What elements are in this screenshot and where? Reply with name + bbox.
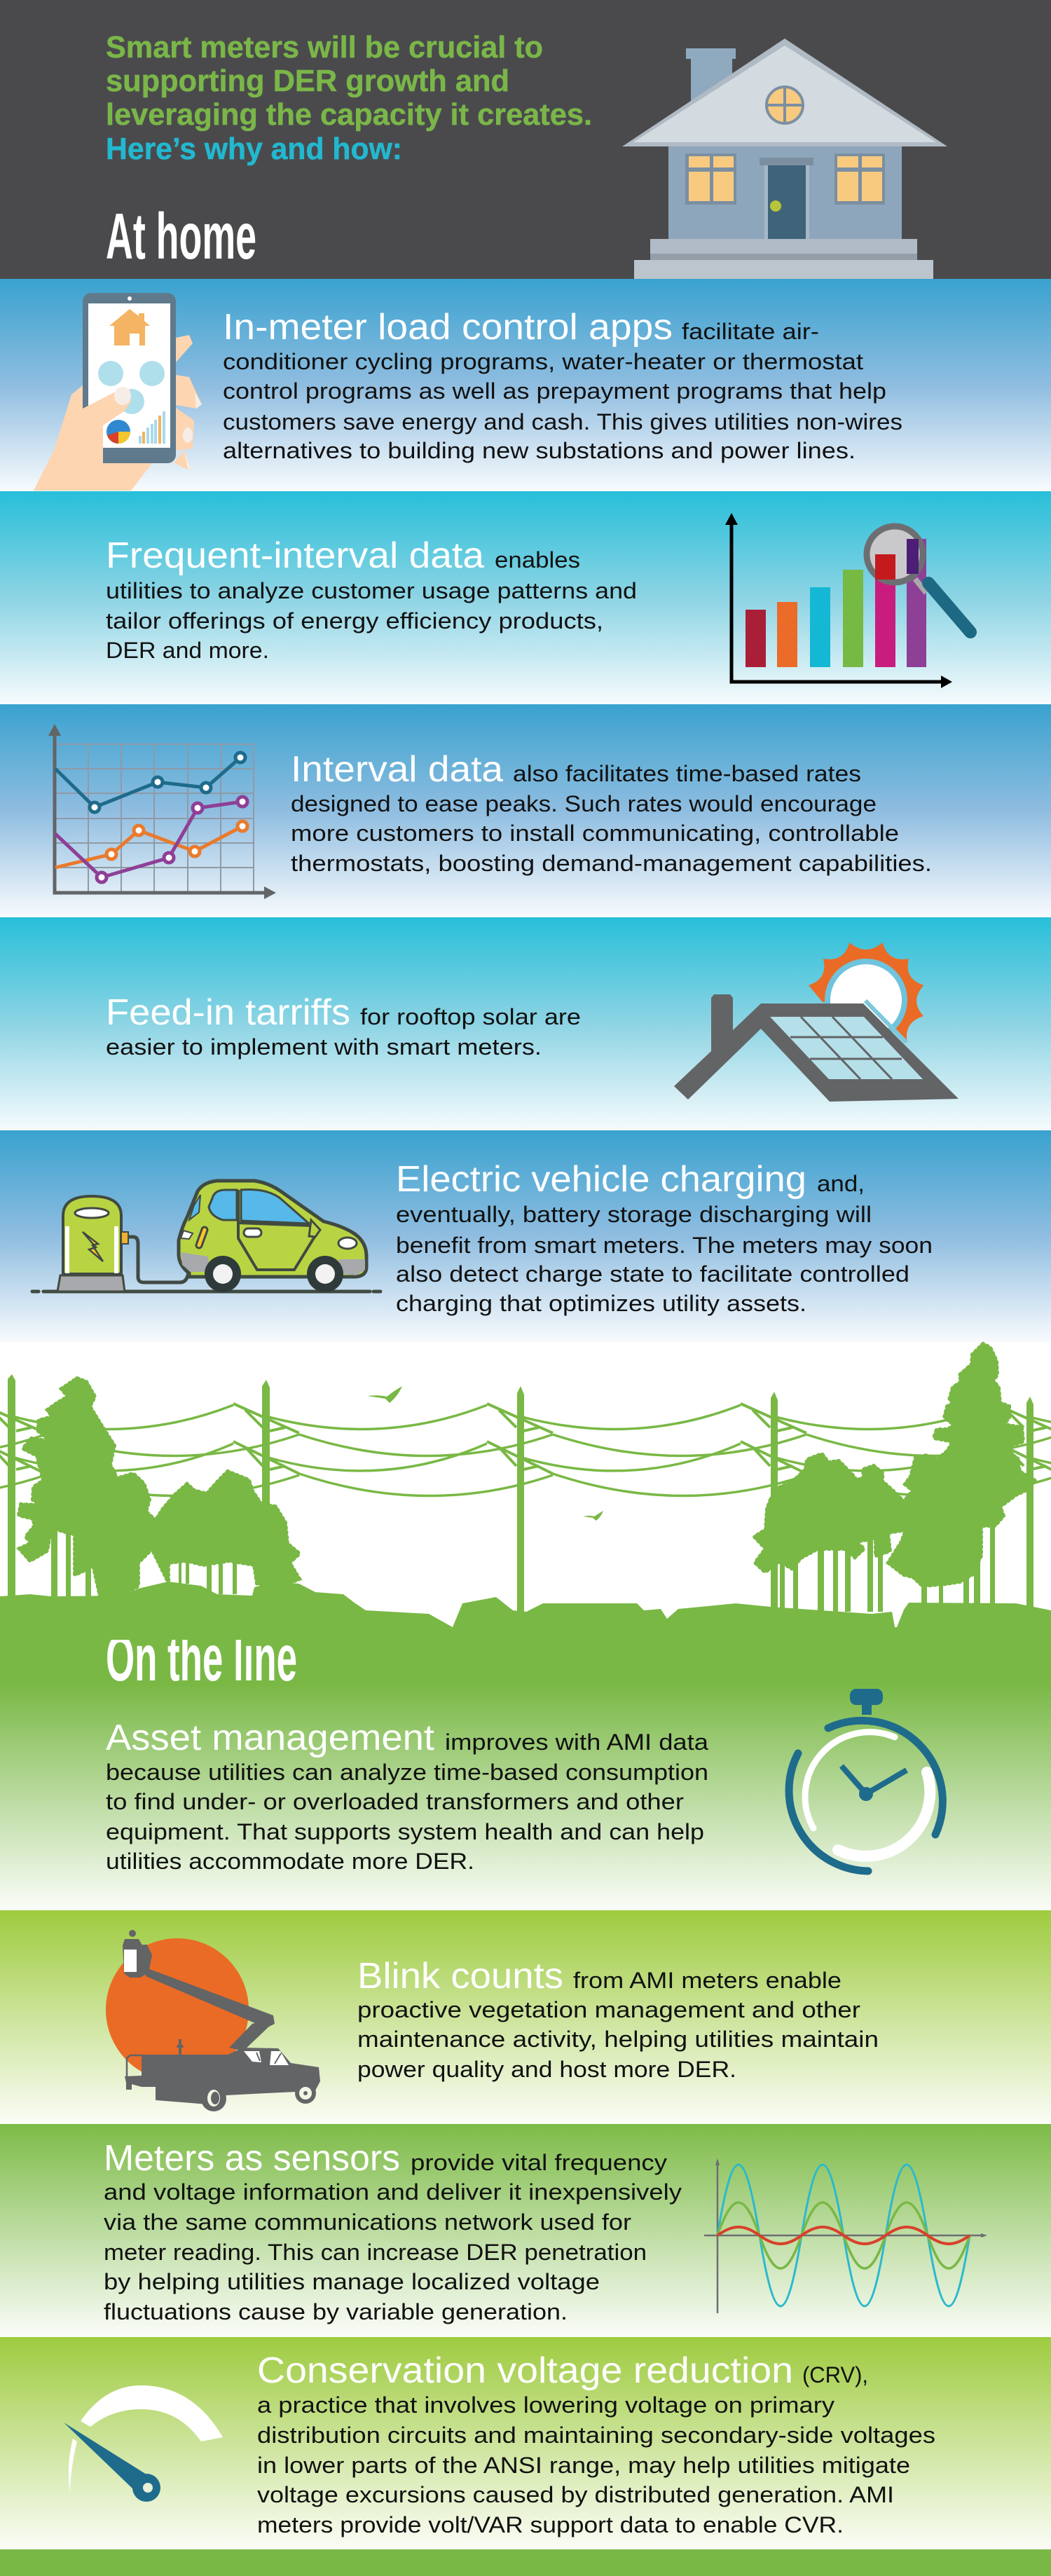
icon: house xyxy=(622,39,947,279)
text block: electric vehicle charging: eventually, battery storage discharging will xyxy=(396,1202,872,1227)
text block: frequent-interval: enables xyxy=(495,547,580,573)
text block: frequent-interval: tailor offerings of energy efficiency products, xyxy=(106,608,603,633)
text block: electric vehicle charging: also detect charge state to facilitate controlled xyxy=(396,1261,909,1287)
icon: bucket truck xyxy=(106,1930,320,2111)
text block: blink counts xyxy=(357,1968,879,2082)
chart: bars with magnifier xyxy=(725,513,970,688)
text block: interval data xyxy=(291,761,932,876)
text block: frequent-interval xyxy=(106,547,637,663)
text block: blink counts: power quality and host more DER. xyxy=(357,2057,736,2082)
text block: interval data: thermostats, boosting demand-management capabilities. xyxy=(291,851,932,876)
heading: feed-in tarriffs: Feed-in tarriffs xyxy=(106,992,350,1033)
title: Smart meters will be crucial to xyxy=(106,30,543,64)
text block: blink counts: proactive vegetation management and other xyxy=(357,1997,860,2022)
text block: asset management xyxy=(106,1729,708,1874)
text block: meters as sensors: fluctuations cause by variable generation. xyxy=(104,2299,568,2324)
heading: conservation voltage reduction: Conservation voltage reduction xyxy=(257,2350,793,2391)
text block: asset management: to find under- or overloaded transformers and other xyxy=(106,1789,684,1814)
panel: in-meter load control apps xyxy=(0,279,1051,491)
panel: header xyxy=(0,0,1051,279)
text block: conservation voltage reduction: a practice that involves lowering voltage on primary xyxy=(257,2392,834,2418)
heading: electric vehicle charging: Electric vehicle charging xyxy=(396,1159,806,1200)
panel: conservation voltage reduction xyxy=(0,2337,1051,2549)
icon: solar roof with sun xyxy=(674,943,959,1102)
heading: meters as sensors: Meters as sensors xyxy=(104,2138,400,2179)
heading: asset management: Asset management xyxy=(106,1718,435,1758)
text block: conservation voltage reduction: in lower parts of the ANSI range, may help utilities mitigate xyxy=(257,2453,910,2478)
panel: feed-in tariffs xyxy=(0,917,1051,1130)
ground xyxy=(0,1582,1051,1640)
panel: blink counts xyxy=(0,1910,1051,2124)
text block: meters as sensors: via the same communications network used for xyxy=(104,2210,631,2235)
heading: interval data: Interval data xyxy=(291,749,503,790)
text block: conservation voltage reduction: meters provide volt/VAR support data to enable CVR. xyxy=(257,2512,844,2537)
text block: asset management: utilities accommodate more DER. xyxy=(106,1849,474,1874)
title: Here’s why and how: xyxy=(106,132,402,166)
text block: meters as sensors: by helping utilities manage localized voltage xyxy=(104,2269,600,2294)
section heading: on the line: On the line xyxy=(106,1622,297,1694)
text block: feed-in tariffs: easier to implement with smart meters. xyxy=(106,1034,542,1060)
section heading: At home: At home xyxy=(106,200,256,273)
text block: interval data: more customers to install communicating, controllable xyxy=(291,821,899,846)
heading: in-meter load control apps: In-meter load control apps xyxy=(223,307,673,348)
text block: load control: facilitate air- xyxy=(682,319,819,344)
text block: load control: conditioner cycling programs, water-heater or thermostat xyxy=(223,349,863,374)
text block: conservation voltage reduction: voltage excursions caused by distributed generation. AMI xyxy=(257,2482,894,2507)
text block: load control: alternatives to building new substations and power lines. xyxy=(223,438,856,463)
text block: frequent-interval: utilities to analyze customer usage patterns and xyxy=(106,578,637,603)
heading: blink counts: Blink counts xyxy=(357,1956,563,1996)
text block: meters as sensors: meter reading. This can increase DER penetration xyxy=(104,2240,647,2265)
text block: blink counts: maintenance activity, helping utilities maintain xyxy=(357,2027,879,2052)
illustration: power lines and trees xyxy=(0,1344,1051,1640)
text block: interval data: designed to ease peaks. Such rates would encourage xyxy=(291,791,877,816)
icon: stopwatch xyxy=(789,1689,942,1871)
text block: interval data: also facilitates time-based rates xyxy=(513,761,861,786)
text block: feed-in tariffs: for rooftop solar are xyxy=(360,1004,581,1029)
text block: electric vehicle charging: and, xyxy=(817,1171,865,1196)
panel: on the line, asset management xyxy=(0,1622,1051,1910)
text block: load control: control programs as well as prepayment programs that help xyxy=(223,378,886,404)
text block: meters as sensors xyxy=(104,2150,682,2324)
title: leveraging the capacity it creates. xyxy=(106,97,592,132)
trees xyxy=(19,1344,1035,1612)
text block: electric vehicle charging: charging that optimizes utility assets. xyxy=(396,1291,806,1316)
title: supporting DER growth and xyxy=(106,64,509,98)
footer band xyxy=(0,2549,1051,2576)
icon: electric vehicle at charger xyxy=(32,1181,380,1292)
birds xyxy=(367,1386,603,1521)
text block: asset management: because utilities can analyze time-based consumption xyxy=(106,1760,708,1785)
text block: load control: customers save energy and cash. This gives utilities non-wires xyxy=(223,409,902,434)
panel: frequent-interval data xyxy=(0,491,1051,704)
text block: conservation voltage reduction: (CRV), xyxy=(802,2362,868,2387)
text block: electric vehicle charging xyxy=(396,1171,933,1316)
title xyxy=(106,30,592,166)
panel: interval data xyxy=(0,704,1051,917)
chart: line chart xyxy=(48,724,276,899)
text block: electric vehicle charging: benefit from smart meters. The meters may soon xyxy=(396,1233,933,1258)
power lines xyxy=(0,1374,1051,1615)
panel: electric vehicle charging xyxy=(0,1130,1051,1342)
text block: meters as sensors: provide vital frequency xyxy=(411,2150,667,2175)
text block: asset management: improves with AMI data xyxy=(445,1729,708,1755)
icon: hand holding phone xyxy=(34,293,202,491)
text block: conservation voltage reduction xyxy=(257,2362,935,2537)
text block: frequent-interval: DER and more. xyxy=(106,638,269,663)
text block: asset management: equipment. That supports system health and can help xyxy=(106,1819,704,1844)
text block: conservation voltage reduction: distribution circuits and maintaining secondary-side voltages xyxy=(257,2423,935,2448)
text block: feed-in tariffs xyxy=(106,1004,581,1060)
icon: gauge xyxy=(64,2385,223,2502)
text block: blink counts: from AMI meters enable xyxy=(573,1968,842,1993)
panel: meters as sensors xyxy=(0,2124,1051,2337)
text block: load control xyxy=(223,319,902,463)
chart: sine waves xyxy=(704,2158,987,2313)
text block: meters as sensors: and voltage information and deliver it inexpensively xyxy=(104,2179,682,2205)
heading: frequent-interval data: Frequent-interval data xyxy=(106,535,484,576)
